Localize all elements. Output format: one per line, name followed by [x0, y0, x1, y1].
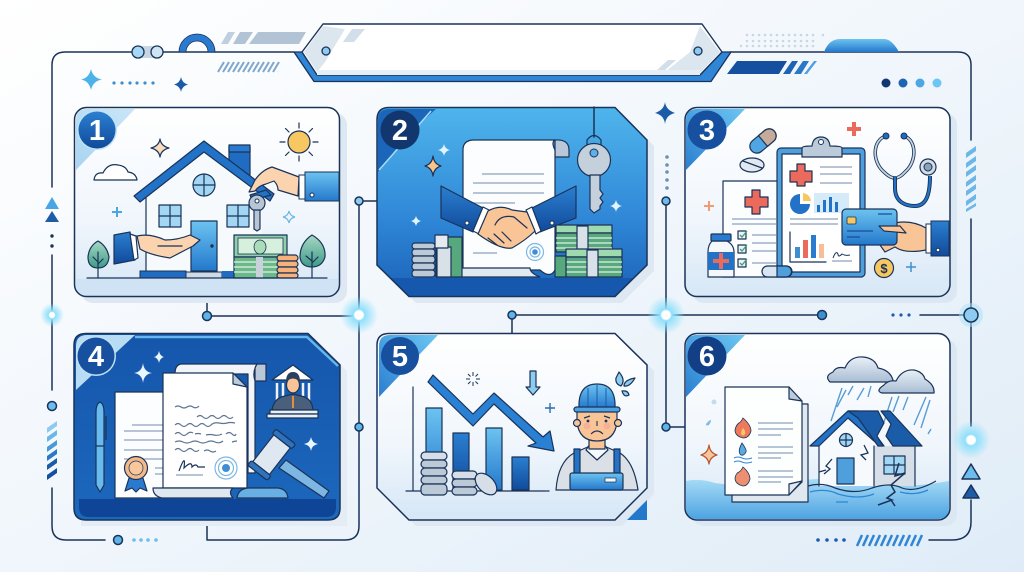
badge 5 [381, 337, 419, 375]
panel 3: medical costs [685, 108, 957, 303]
icon: flood water and ground crack [808, 463, 936, 506]
icon: dollar coin and plus [874, 258, 916, 278]
icon: insurance document [725, 387, 808, 502]
ground line [87, 277, 327, 279]
panel 2: contract and handshake [377, 107, 654, 303]
outer connector frame [52, 52, 971, 540]
icon: hanging key [578, 107, 610, 213]
node: left junction dots and glow [40, 197, 64, 480]
panel 4: legal documents [74, 334, 347, 526]
node: right junction and arrows [891, 146, 990, 498]
capsule on desk [762, 266, 792, 277]
icon: pen [96, 402, 106, 492]
icon: cash and coins [234, 235, 298, 278]
icon: medicine bottle [708, 234, 734, 277]
badge 4: 4 [88, 341, 104, 373]
icon: pills [704, 122, 861, 211]
sparkles [411, 144, 622, 226]
icon: cloud [94, 165, 137, 180]
icon: stethoscope [875, 133, 936, 206]
icon: hand with credit card [842, 209, 949, 256]
node: centre-left connectors [202, 197, 378, 431]
badge 2: 2 [392, 115, 408, 147]
node: bottom-left dots [114, 536, 158, 544]
icon: clipboard [777, 137, 865, 277]
bar chart [406, 387, 549, 491]
icon: certificate with ribbon [115, 392, 170, 498]
top-right ornaments [727, 34, 942, 88]
badge 3 [688, 110, 726, 150]
panel 1: home purchase [74, 108, 347, 303]
node: bottom-right dots and hatch [816, 535, 922, 546]
icon: handshake [441, 186, 576, 248]
badge 1 [77, 110, 117, 150]
small accents [701, 400, 717, 464]
icon: damaged house [810, 411, 922, 486]
panel 5: income drop [377, 334, 654, 526]
panel 6: disaster and insurance [685, 334, 957, 526]
icon: dollar coin and plus: $ [880, 261, 888, 276]
badge 4 [76, 336, 116, 376]
badge 5: 5 [392, 341, 408, 373]
top-left ornaments [81, 32, 306, 92]
icon: coins [421, 452, 501, 499]
icon: cash stacks [555, 225, 622, 277]
icon: back scroll [175, 364, 266, 473]
icon: coins and cash left [412, 235, 462, 277]
sparkles [134, 351, 318, 451]
icon: sun [280, 123, 318, 161]
icon: falling arrow [428, 375, 554, 451]
node: centre-right connectors [508, 102, 826, 431]
icon: receiving hand [114, 232, 200, 264]
icon: burst and down arrow [466, 371, 555, 413]
icon: worried worker [556, 372, 638, 490]
icon: storm clouds and rain [828, 357, 934, 434]
badge 1: 1 [89, 115, 105, 147]
icon: giving hand with key [249, 167, 339, 231]
icon: gavel [237, 429, 329, 498]
icon: contract scroll [450, 140, 569, 277]
icon: signed contract [153, 373, 247, 498]
badge 2 [380, 110, 420, 150]
icon: medical report [723, 181, 779, 277]
icon: house [134, 141, 274, 278]
badge 3: 3 [699, 115, 715, 147]
icon: sparkle and plus [112, 139, 295, 223]
icon: judge with courthouse [267, 365, 318, 418]
title banner [294, 24, 731, 82]
badge 6: 6 [699, 341, 715, 373]
icon: trees [88, 235, 325, 278]
badge 6 [688, 336, 726, 376]
